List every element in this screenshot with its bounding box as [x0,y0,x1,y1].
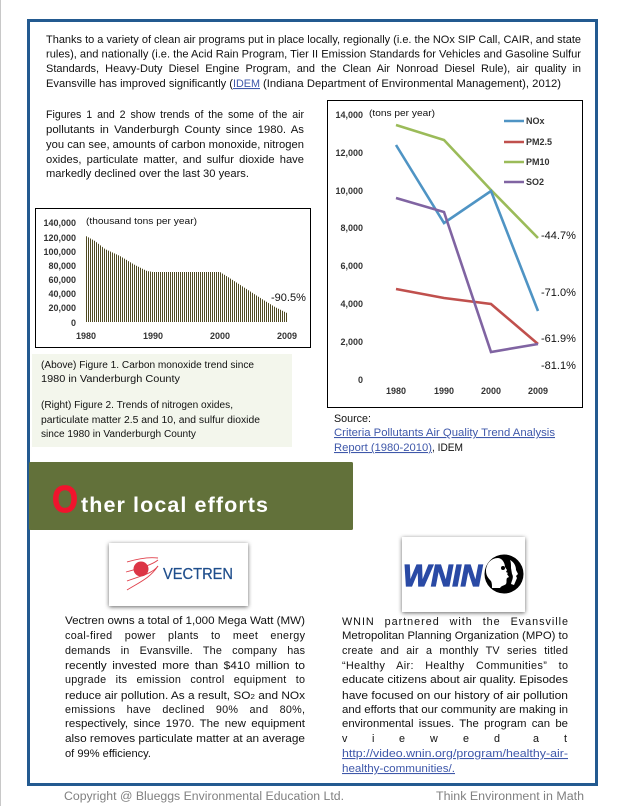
footer: tagline: Think Environment in Math [436,791,584,803]
text block: Vectren: of 99% efficiency. [65,748,151,760]
line: NOx [396,145,538,311]
legend: SO2 [526,177,544,187]
text block: WNIN: and efforts that our community are making in [342,704,568,716]
text block: WNIN: http://video.wnin.org/program/healthy-air- [342,748,568,760]
figure captions panel [32,354,292,447]
percent change label: -90.5% [271,292,306,304]
intro paragraph: IDEM [233,78,260,90]
chart: carbon monoxide trend [36,208,310,348]
y axis labels: 120,000 [43,233,76,243]
y axis labels: 0 [358,375,363,385]
text block: Vectren: emissions have declined 90% and 80%, [65,704,305,716]
y axis labels: 4,000 [340,299,363,309]
intro paragraph: Thanks to a variety of clean air programs put in place locally, regionally (i.e. the NOx SIP Call, CAIR, and state [46,34,581,46]
y axis labels: 2,000 [340,337,363,347]
legend: PM2.5 [526,137,552,147]
percent change labels [541,230,576,372]
legend: NOx [526,116,545,126]
percent change labels: -71.0% [541,287,576,299]
footer: copyright: Copyright @ Blueggs Environmental Education Ltd. [64,791,344,803]
figure captions panel: (Right) Figure 2. Trends of nitrogen oxides, [41,400,233,411]
figures paragraph: oxides, particulate matter, and sulfur dioxide have [46,154,304,166]
x axis labels: 2009 [277,331,297,341]
section heading banner: ther local efforts [81,493,268,517]
text block: Vectren: coal-fired power plants to meet energy [65,630,306,642]
text block: Vectren: recently invested more than $410 million to [65,660,305,672]
figures paragraph: pollutants in Vanderburgh County since 1980. As [46,124,305,136]
section heading banner [29,462,353,530]
x axis labels: 2009 [528,386,548,396]
logo: WNIN and PBS: WNIN [403,558,483,593]
figure captions panel: 1980 in Vanderburgh County [41,374,180,385]
y axis labels: 40,000 [48,289,76,299]
figures paragraph: markedly declined over the last 30 years. [46,168,249,180]
source note: Criteria Pollutants Air Quality Trend Analysis [334,427,556,439]
text block: WNIN: have focused on our history of air pollution [342,690,568,702]
text block: Vectren: demands in Evansville. The company has [65,645,306,657]
x axis labels [76,331,297,341]
figures paragraph: you can see, amounts of carbon monoxide, nitrogen [46,139,304,151]
figures paragraph [46,109,305,180]
intro paragraph: Evansville has improved significantly ( [46,78,233,90]
logo: Vectren [109,543,248,606]
text block: WNIN: viewedat [342,733,567,745]
y axis labels: 60,000 [48,275,76,285]
text block: WNIN: create and air a monthly TV series titled [342,645,568,657]
chart: pollutant trends [328,100,582,408]
x axis labels: 1980 [386,386,406,396]
text block: Vectren: Vectren owns a total of 1,000 Mega Watt (MW) [65,615,305,627]
intro paragraph: (Indiana Department of Environmental Management), 2012) [263,78,561,90]
percent change labels: -44.7% [541,230,576,242]
y axis labels: 0 [71,318,76,328]
logo: Vectren: VECTREN [163,566,233,583]
figure captions panel: (Above) Figure 1. Carbon monoxide trend since [41,360,254,371]
y axis labels [335,110,363,385]
y axis labels: 100,000 [43,247,76,257]
chart unit label: (tons per year) [369,108,435,119]
x axis labels: 2000 [481,386,501,396]
text block: WNIN: WNIN partnered with the Evansville [342,616,568,628]
y axis labels: 14,000 [335,110,363,120]
bars [86,236,287,322]
source note: , IDEM [432,442,463,454]
line: PM2.5 [396,289,538,344]
source note: Report (1980-2010) [334,442,432,454]
text block: Vectren: reduce air pollution. As a result, SO 2 and NOx [65,690,306,702]
intro paragraph [46,34,581,90]
x axis labels: 1980 [76,331,96,341]
legend: PM10 [526,157,550,167]
line: SO2 [396,198,538,352]
y axis labels: 80,000 [48,261,76,271]
figure captions panel: since 1980 in Vanderburgh County [41,429,196,440]
figures paragraph: Figures 1 and 2 show trends of the some of the air [46,109,304,121]
logo: WNIN and PBS [402,537,525,612]
text block: WNIN: healthy-communities/. [342,763,455,775]
text block: Vectren: upgrade its emission control equipment to [65,674,305,686]
percent change labels: -81.1% [541,360,576,372]
line: PM10 [396,125,538,238]
y axis labels: 140,000 [43,218,76,228]
text block: Vectren: also removes particulate matter at an average [65,733,305,745]
y axis labels: 12,000 [335,148,363,158]
text block: Vectren [65,615,306,760]
intro paragraph: rules), and nationally (i.e. the Acid Rain Program, Tier II Emission Standards for Vehicles and Gasoline Sulfur [46,48,581,60]
y axis labels: 10,000 [335,186,363,196]
y axis labels: 6,000 [340,261,363,271]
text block: WNIN: environmental issues. The program can be [342,718,568,730]
text block: WNIN: educate citizens about air quality. Episodes [342,674,569,686]
intro paragraph: Standards, Heavy-Duty Diesel Engine Program, and the Clean Air Nonroad Diesel Rule), air quality in [46,63,581,75]
y axis labels [43,218,76,328]
chart unit label: (thousand tons per year) [86,216,197,227]
source note [334,413,556,454]
text block: WNIN: “Healthy Air: Healthy Communities” to [342,660,568,672]
section heading banner: O [52,479,78,521]
text block: WNIN [342,616,569,775]
figure captions panel: particulate matter 2.5 and 10, and sulfur dioxide [41,415,260,426]
source note: Source: [334,413,371,425]
x axis labels [386,386,548,396]
percent change labels: -61.9% [541,333,576,345]
x axis labels: 1990 [143,331,163,341]
legend [504,116,552,187]
x axis labels: 1990 [434,386,454,396]
y axis labels: 8,000 [340,223,363,233]
text block: WNIN: Metropolitan Planning Organization (MPO) to [342,630,568,642]
y axis labels: 20,000 [48,303,76,313]
text block: Vectren: respectively, since 1970. The new equipment [65,718,305,730]
x axis labels: 2000 [210,331,230,341]
